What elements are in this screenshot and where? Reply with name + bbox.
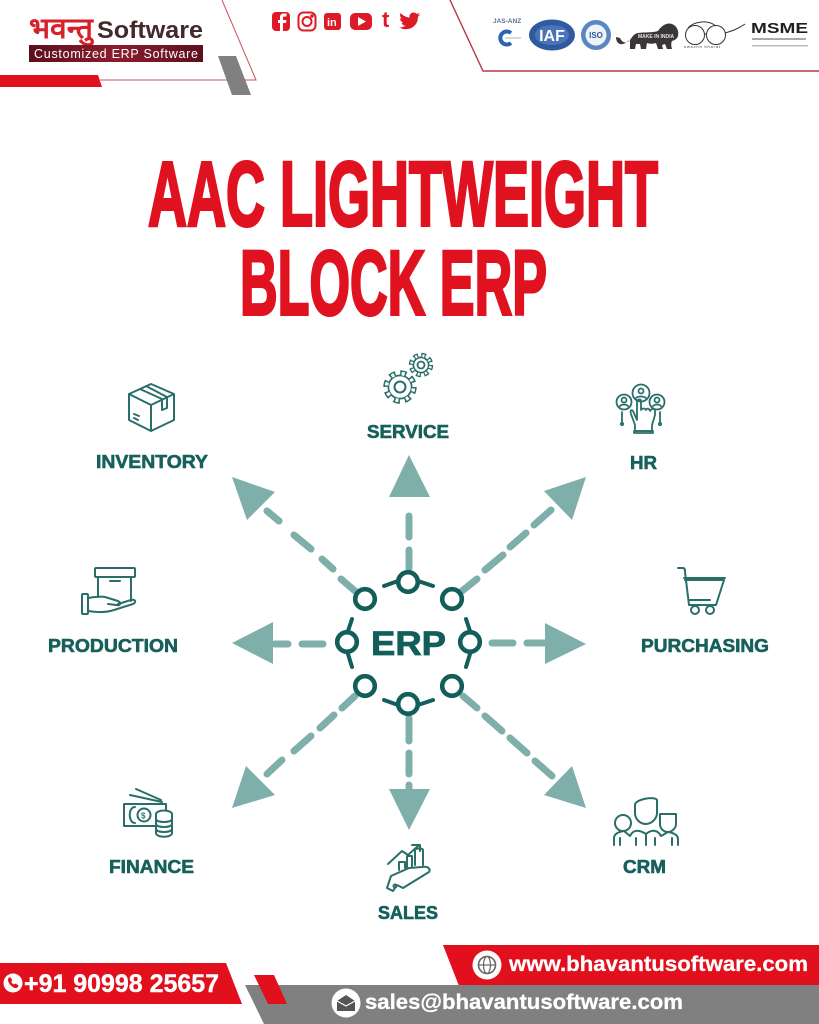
module: CRM: CRM [623, 857, 666, 877]
module: sales: SALES [378, 903, 438, 923]
logo: MEME: MSME [751, 20, 808, 37]
icon: growth chart in hand [387, 845, 430, 891]
logo: Make in India lion [616, 23, 678, 49]
icon: people and hand [616, 384, 664, 433]
footer: website: www.bhavantusoftware.com [508, 952, 808, 976]
social media icons [272, 7, 420, 32]
ERP hub [232, 455, 586, 830]
icon: shopping cart [678, 568, 725, 614]
icon: tumblr: t [382, 7, 390, 32]
module: production: PRODUCTION [48, 636, 178, 656]
module: purchasing [641, 568, 769, 656]
logo: Bhavantu Software: Software [97, 17, 203, 44]
footer: shapes [0, 945, 819, 1024]
logo: Bhavantu Software [29, 13, 203, 62]
module: purchasing: PURCHASING [641, 636, 769, 656]
icon: envelope [332, 988, 360, 1018]
logo: IAF [529, 20, 575, 50]
title [148, 144, 658, 334]
arrow: to production [232, 622, 323, 664]
module: production [48, 568, 178, 656]
icon: instagram [298, 12, 316, 30]
module: finance: FINANCE [109, 857, 194, 877]
icon: globe [472, 950, 502, 980]
icon: gears [386, 356, 430, 400]
icon: linkedin: in [327, 17, 337, 29]
header: right frame line [450, 0, 819, 71]
module: finance [109, 789, 194, 877]
arrow: to inventory [232, 477, 355, 591]
logo: Swachh Bharat glasses [684, 22, 745, 49]
arrow: to service [389, 455, 430, 568]
header: left frame [0, 0, 256, 95]
icon: youtube [350, 13, 372, 30]
footer: email: sales@bhavantusoftware.com [365, 990, 683, 1014]
arrow: to sales [389, 718, 430, 830]
module: sales [378, 845, 438, 923]
footer: phone: +91 90998 25657 [24, 970, 219, 998]
icon: facebook [272, 12, 290, 31]
ERP centre ring [337, 572, 480, 714]
logo: JAS-ANZ: JAS-ANZ [493, 18, 521, 25]
arrow: to HR [462, 477, 586, 591]
logo: Make in India lion: MAKE IN INDIA [638, 34, 674, 40]
module: HR [616, 384, 664, 473]
logo: JAS-ANZ [493, 18, 521, 44]
ERP centre ring: ERP [371, 625, 446, 663]
icon: box [129, 384, 174, 431]
module: service: SERVICE [367, 422, 449, 442]
icon: phone [4, 974, 22, 992]
icon: hand holding box [82, 568, 135, 614]
logo: Bhavantu Software: Customized ERP Software [34, 47, 198, 61]
logo: Swachh Bharat glasses: swachh bharat [684, 44, 721, 49]
title: BLOCK ERP [240, 232, 547, 334]
module: inventory: INVENTORY [96, 452, 208, 472]
icon: twitter [399, 13, 420, 29]
logo: ISO: ISO [589, 31, 603, 40]
logo: ISO [581, 20, 611, 50]
certification logos [493, 18, 808, 50]
logo: MEME [751, 20, 808, 46]
logo: Bhavantu Software: भवन्तु [29, 13, 95, 47]
module: inventory [96, 384, 208, 472]
icon: team of three [614, 798, 678, 845]
logo: IAF: IAF [539, 28, 565, 45]
icon: linkedin [324, 13, 341, 30]
arrow: to finance [232, 696, 355, 808]
module: HR: HR [630, 453, 657, 473]
arrow: to CRM [463, 696, 586, 808]
module: CRM [614, 798, 678, 877]
module: service [367, 356, 449, 442]
icon: cash and coins: $ [141, 812, 146, 820]
arrow: to purchasing [492, 623, 586, 664]
